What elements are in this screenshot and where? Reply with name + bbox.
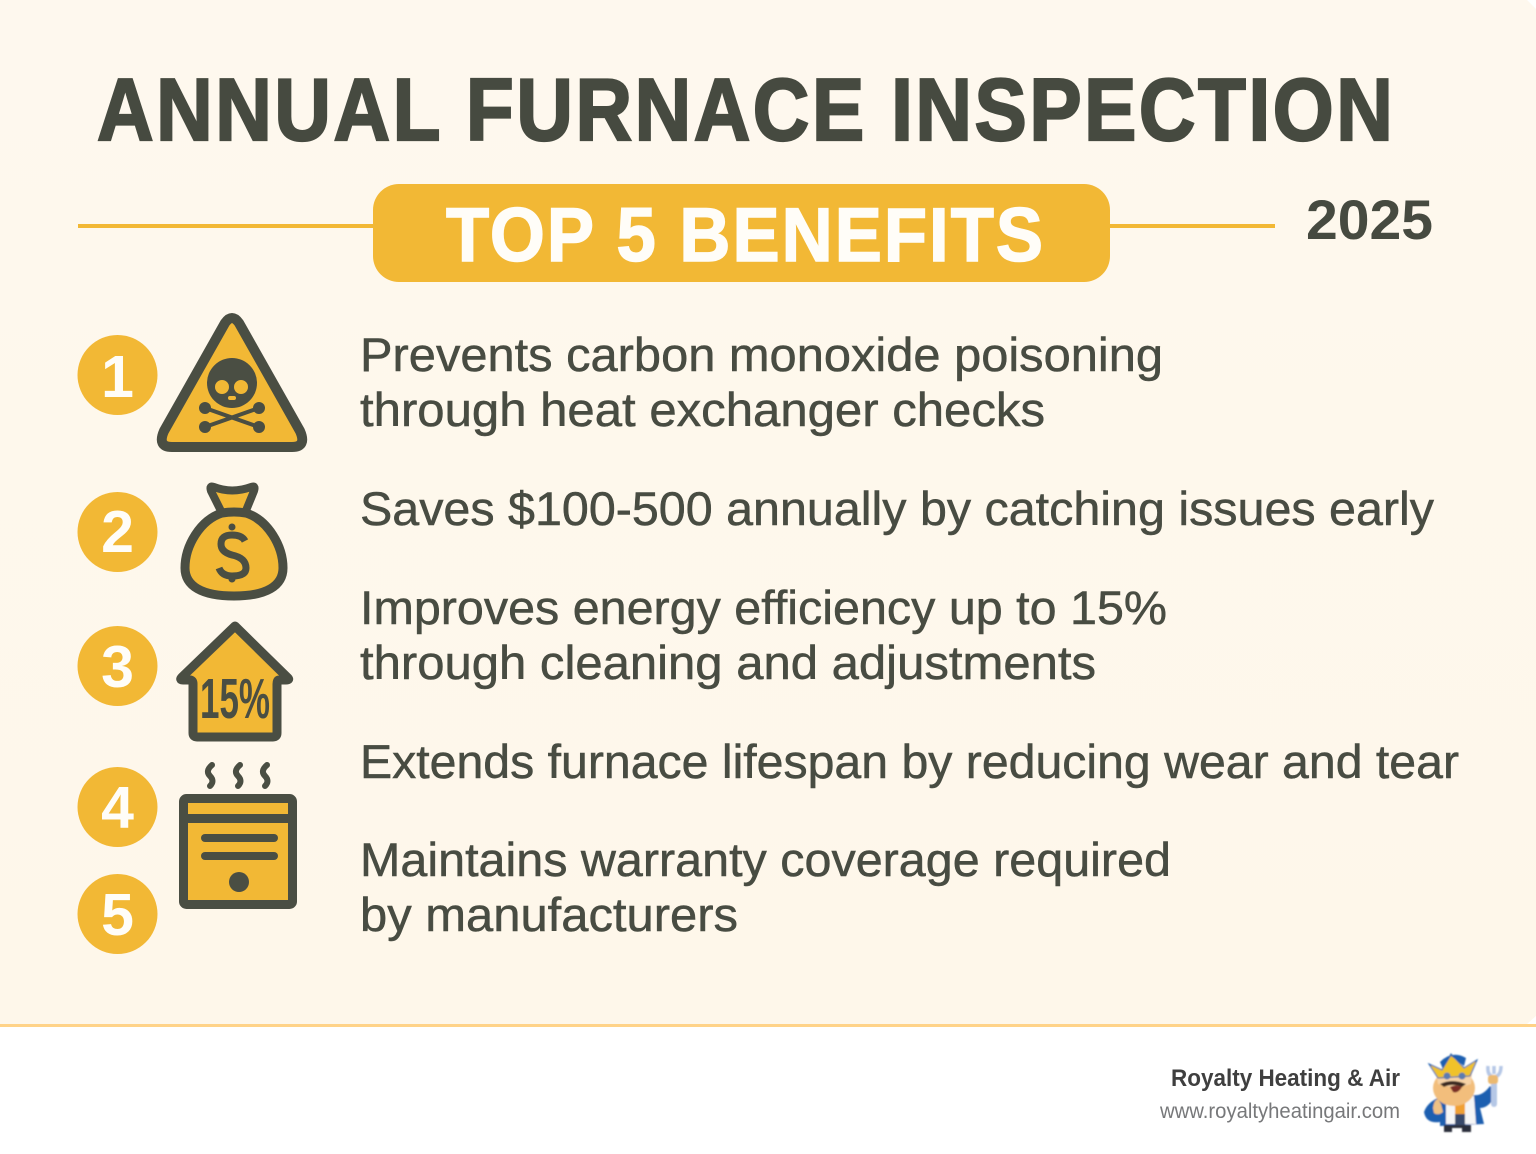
number badge 5: [78, 874, 158, 954]
benefit 2 text: Saves $100-500 annually by catching issues early: [360, 482, 1435, 535]
number badge 4: 4: [101, 775, 134, 841]
benefit 1 text: Prevents carbon monoxide poisoning: [360, 328, 1163, 381]
benefit 5 text: Maintains warranty coverage required: [360, 833, 1171, 886]
title: ANNUAL FURNACE INSPECTION: [97, 61, 1393, 159]
icon: house with 15 percent: [181, 626, 289, 737]
benefit 3 text: Improves energy efficiency up to 15%: [360, 581, 1167, 634]
subtitle banner: TOP 5 BENEFITS: [446, 193, 1043, 278]
subtitle banner: [78, 184, 1275, 282]
icon: skull warning triangle: [162, 318, 302, 447]
footer brand text: [1159, 1065, 1400, 1123]
number badge 3: [78, 626, 158, 706]
benefit 5 text: [360, 833, 1171, 941]
number badge 4: [78, 767, 158, 847]
icon: money bag: [185, 486, 283, 596]
benefit 3 text: through cleaning and adjustments: [360, 636, 1096, 689]
benefit 1 text: through heat exchanger checks: [360, 383, 1045, 436]
number badge 1: [78, 335, 158, 415]
number badge 2: 2: [101, 499, 134, 565]
footer brand text: Royalty Heating & Air: [1171, 1065, 1400, 1092]
benefit 1 text: [360, 328, 1163, 436]
year: 2025: [1306, 188, 1433, 251]
icon: house with 15 percent: 15%: [200, 667, 270, 731]
icon: furnace with steam: [184, 765, 293, 904]
number badge 3: 3: [101, 634, 134, 700]
benefit 3 text: [360, 581, 1167, 689]
benefit 4 text: Extends furnace lifespan by reducing wear and tear: [360, 735, 1459, 788]
footer brand text: www.royaltyheatingair.com: [1159, 1100, 1400, 1123]
benefit 5 text: by manufacturers: [360, 888, 738, 941]
icon: king mascot logo: [1424, 1054, 1501, 1132]
number badge 1: 1: [101, 344, 134, 410]
number badge 2: [78, 492, 158, 572]
number badge 5: 5: [101, 882, 134, 948]
